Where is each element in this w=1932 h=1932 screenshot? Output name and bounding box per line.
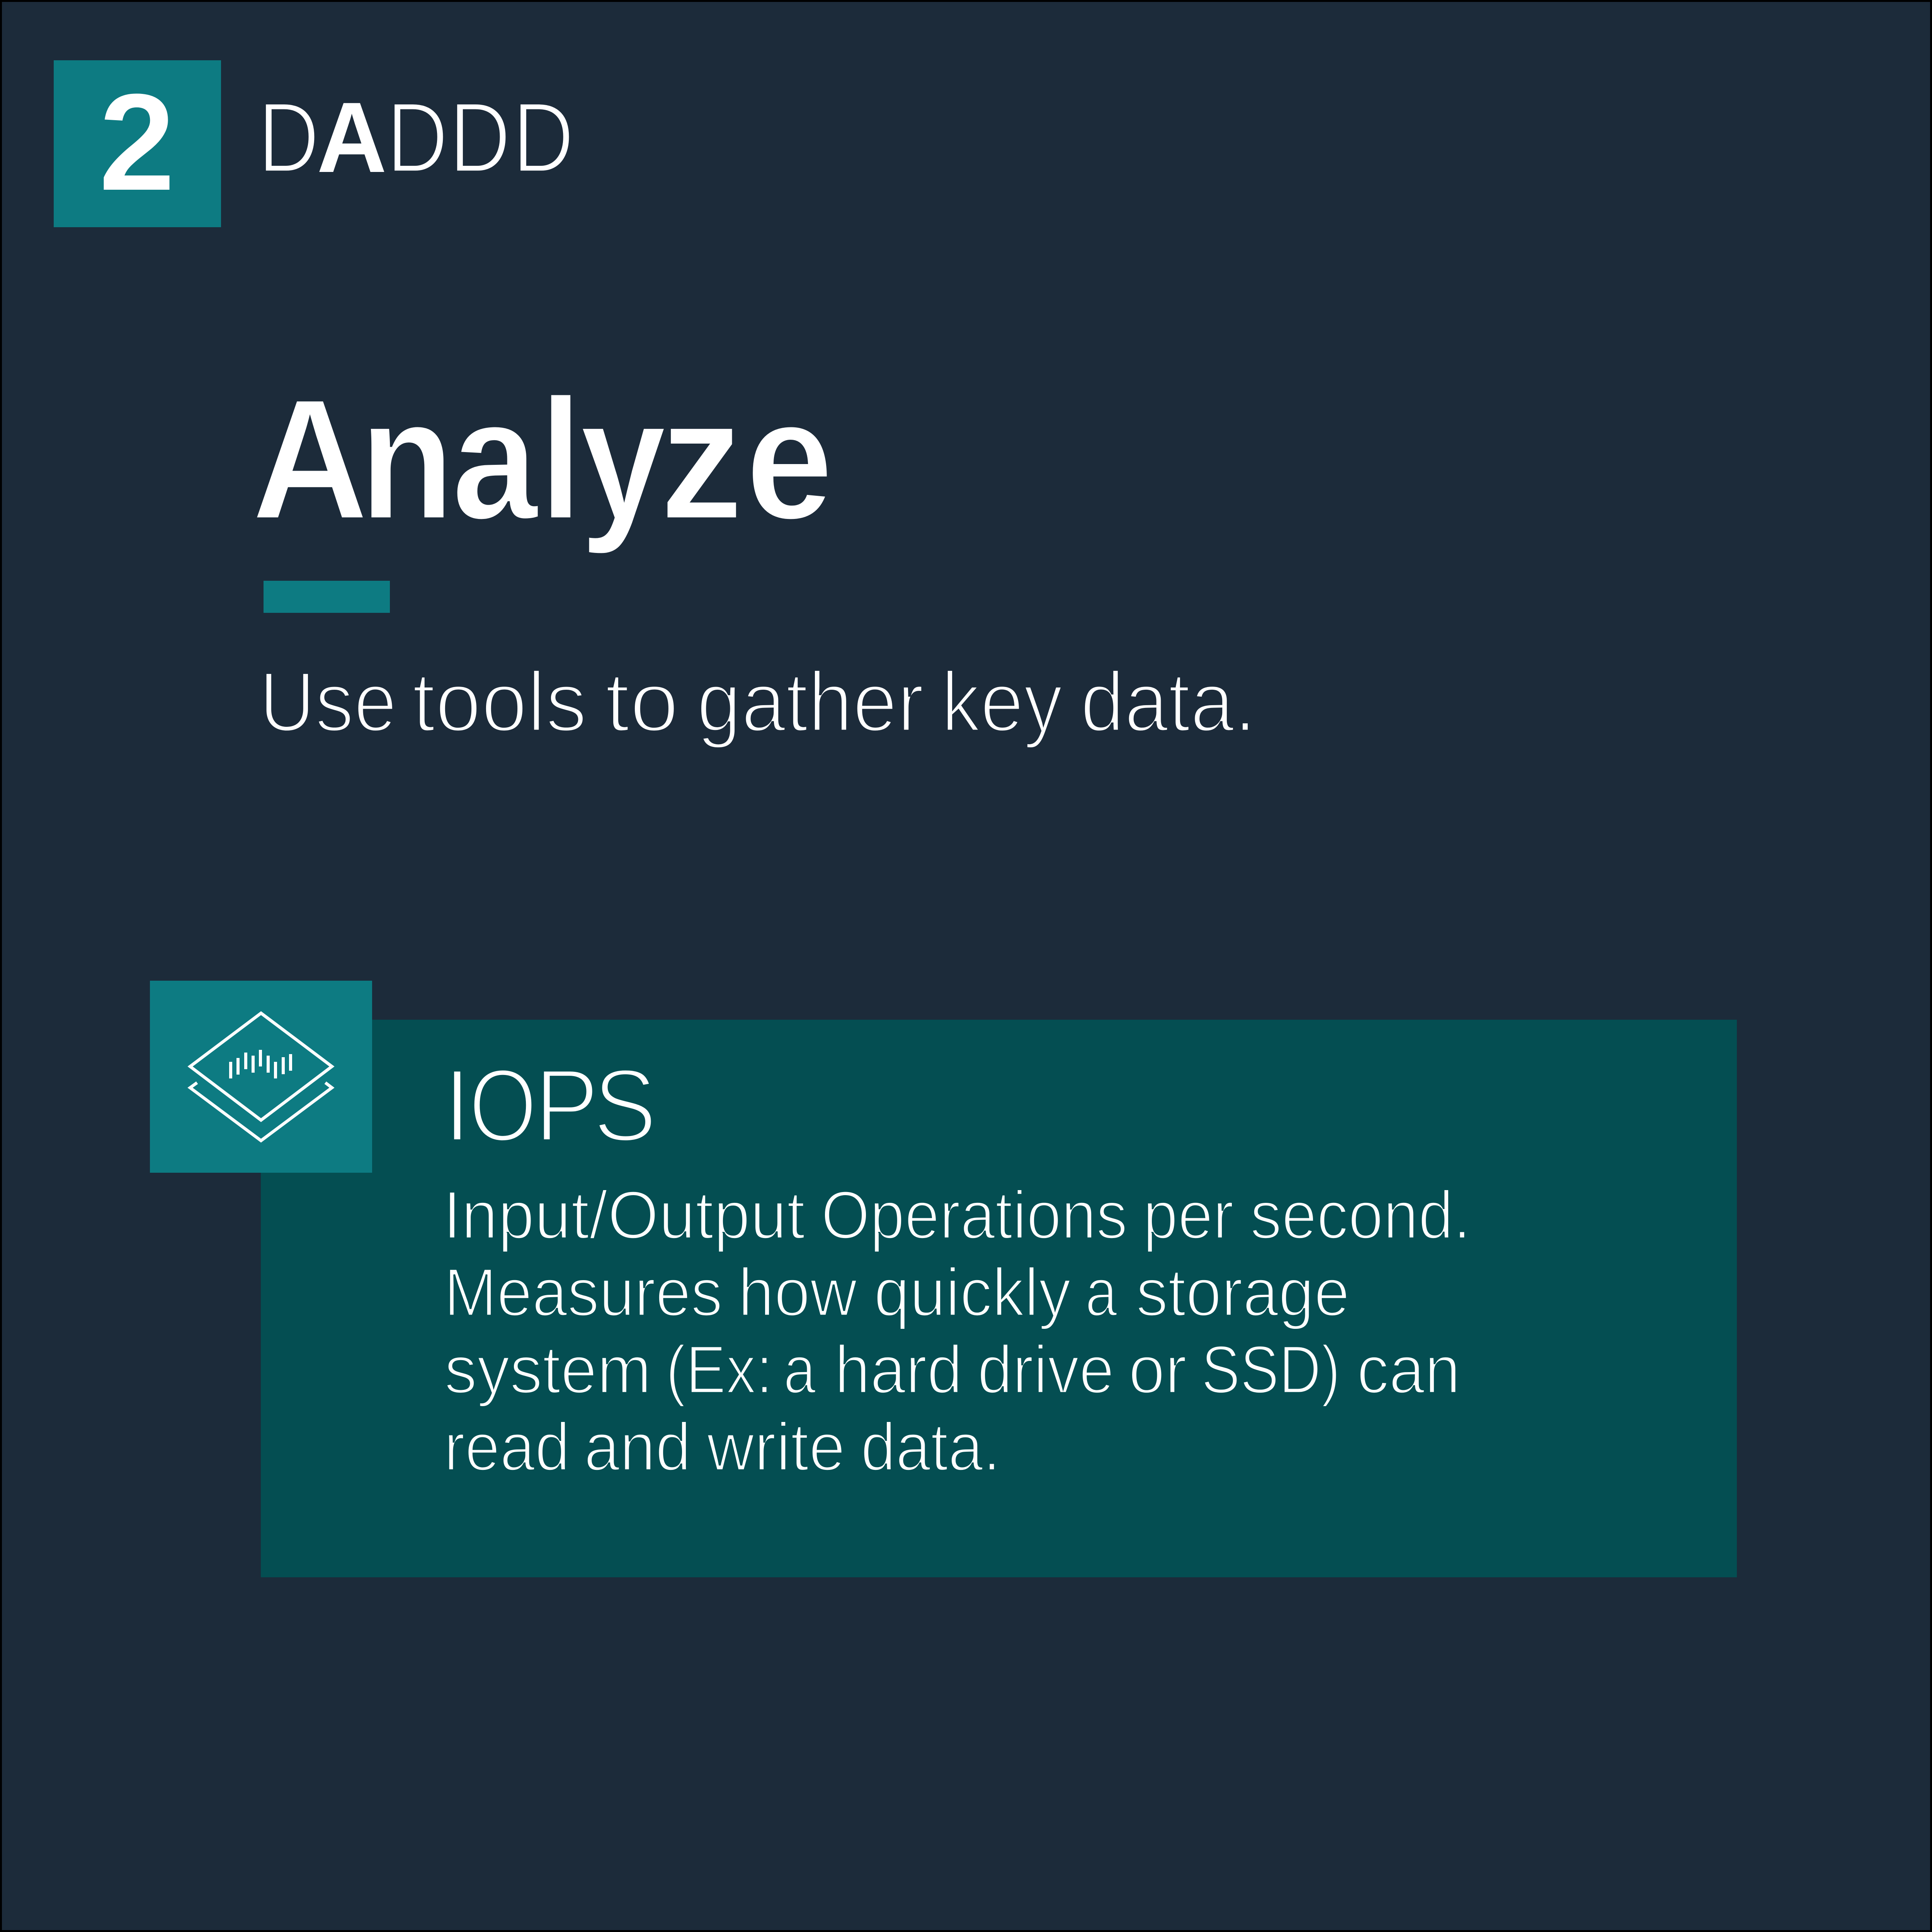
panel body text: Operations [821,1177,1128,1253]
panel body text: quickly [874,1255,1071,1330]
icon: signal bars [229,1050,292,1078]
subheading: gather [697,654,924,749]
heading: Analyze: e [746,363,833,555]
panel body text: second. [1250,1177,1471,1253]
panel heading: S [593,1047,657,1163]
icon: upper layer diamond [190,1013,332,1120]
panel body text: read [444,1409,570,1485]
subheading: data. [1080,654,1256,749]
acronym: DADDD: D [449,82,511,193]
acronym: DADDD: D [258,82,320,193]
acronym: DADDD [258,82,574,193]
panel body text: how [738,1255,857,1330]
panel body text: drive [978,1332,1114,1408]
panel: IOPS definition [261,1020,1737,1577]
step number badge [54,60,221,227]
panel body text: write [707,1409,845,1485]
icon: lower layer outline [190,1083,332,1141]
panel heading: O [469,1047,537,1163]
heading accent bar [264,581,390,613]
panel body text: Measures [444,1255,723,1330]
panel body text: Input/Output [443,1177,805,1253]
subheading: key [941,654,1063,749]
heading: Analyze: naly [360,363,667,556]
panel heading: P [534,1047,599,1163]
panel body text: (Ex: [666,1332,773,1408]
panel body text: a [1085,1255,1117,1330]
subheading: tools [412,654,587,749]
panel body text: or [1128,1332,1187,1408]
panel body text: SSD) [1201,1332,1340,1408]
subheading: Use [259,654,397,749]
panel body text: per [1143,1177,1234,1253]
panel background [261,1020,1737,1577]
panel body text: a [784,1332,816,1408]
panel body text: hard [835,1332,963,1408]
panel body text: and [584,1409,691,1485]
heading: Analyze: z [660,363,743,555]
panel heading: I [443,1047,471,1163]
subheading: to [605,654,679,749]
step number badge: 2 [98,64,176,220]
panel body text: storage [1136,1255,1350,1330]
heading: Analyze: A [252,363,369,555]
acronym: DADDD: D [386,82,448,193]
icon tile: layered data chip [150,981,372,1173]
acronym: DADDD: A [317,82,387,193]
panel body text [443,1177,1471,1485]
panel body text: can [1357,1332,1461,1408]
panel body text: system [444,1332,651,1408]
acronym: DADDD: D [512,82,574,193]
panel body text: data. [861,1409,1001,1485]
